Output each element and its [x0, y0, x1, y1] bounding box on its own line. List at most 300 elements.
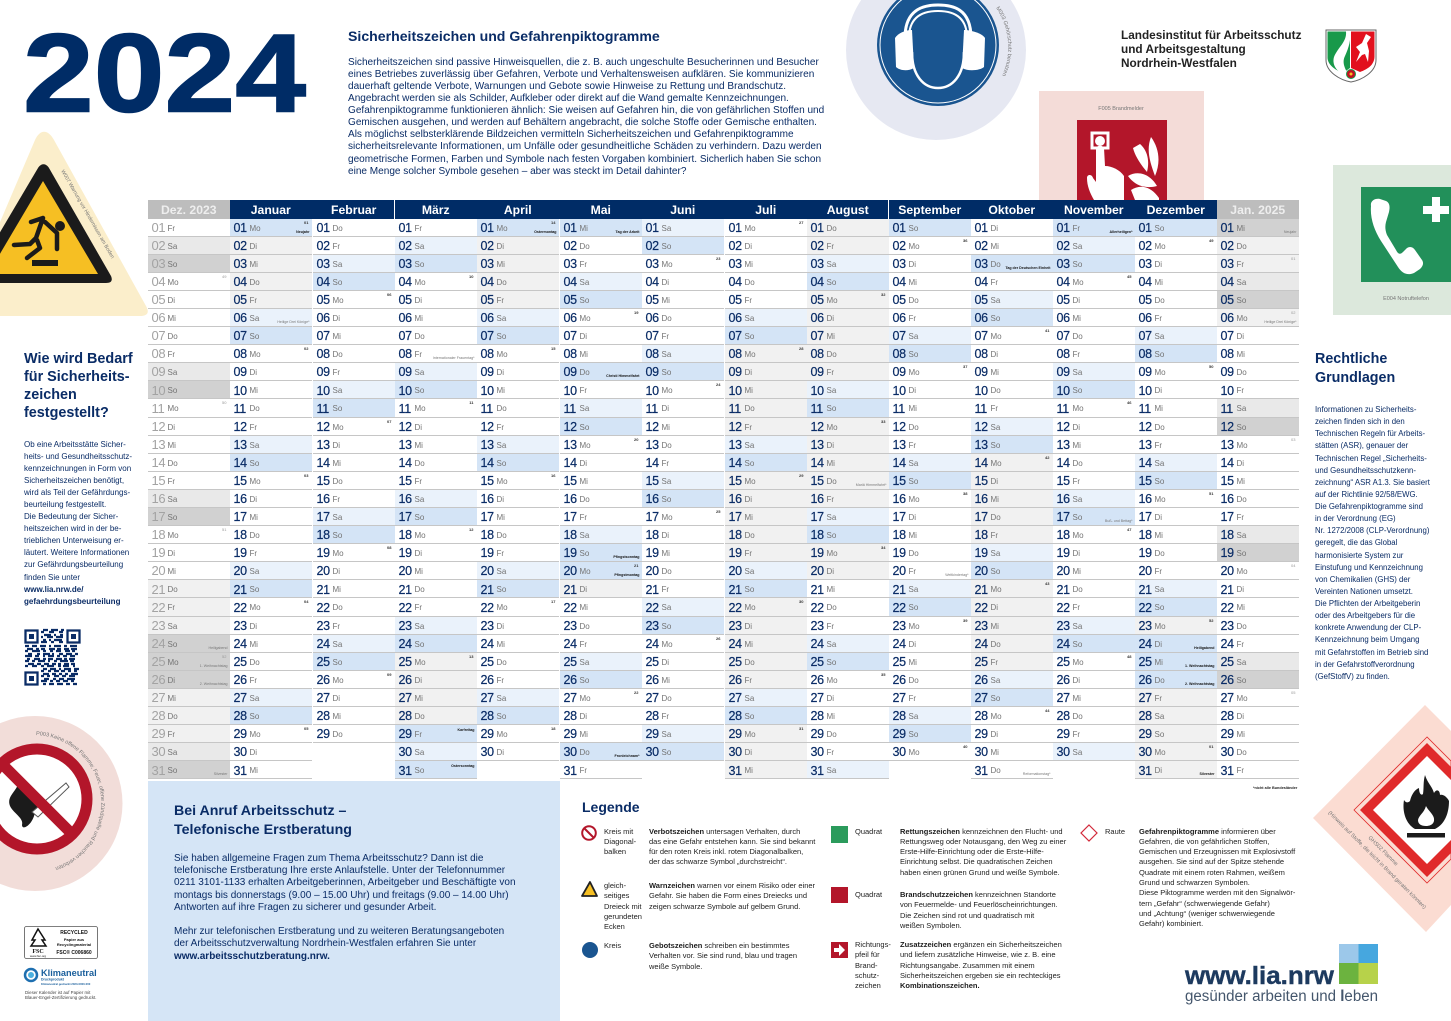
calendar column: August: Do	[826, 730, 837, 739]
calendar column: Juni: 01	[646, 221, 659, 235]
sign: warning trip hazard W007	[0, 132, 148, 316]
calendar column: April: 23	[480, 619, 494, 633]
calendar column: März: 20	[398, 564, 412, 578]
calendar column: Dezember: Di	[1154, 386, 1162, 395]
calendar column: Oktober: 17	[974, 510, 988, 524]
calendar column: Dezember 2023: 31	[152, 762, 165, 778]
calendar column: Dezember 2023: Di	[168, 296, 175, 305]
calendar column: April	[477, 203, 559, 761]
calendar column: März: Mi	[414, 567, 423, 576]
calendar column: Januar 2025: Do	[1236, 368, 1247, 377]
calendar column: Dezember 2023: 27	[152, 690, 165, 705]
intro text: eine Menge solcher Symbole gesehen – aber was steckt im Detail dahinter?	[348, 166, 686, 177]
calendar column: Januar: Neujahr	[296, 230, 310, 234]
calendar column: März: 18	[398, 528, 412, 542]
calendar column: Februar: 14	[316, 456, 330, 470]
calendar column: Januar 2025: Do	[1236, 622, 1247, 631]
calendar column: August: 01	[810, 221, 824, 235]
legend: Brandschutzzeichen	[855, 890, 1058, 930]
calendar column: Februar: Di	[332, 694, 340, 703]
legend: Zusatzzeichen: Brand-	[855, 961, 878, 970]
calendar column: September: Fr	[908, 567, 916, 576]
calendar column: Juli: 31	[728, 764, 742, 778]
calendar column: Januar: 17	[234, 510, 247, 524]
legend icon: prohibition circle	[582, 826, 596, 840]
calendar column: Juni: 02	[646, 239, 659, 253]
calendar column: Dezember: 1. Weihnachtstag	[1185, 664, 1214, 668]
calendar column: Juni: So	[662, 622, 671, 631]
calendar column: Januar 2025: 01	[1291, 256, 1296, 261]
calendar column: Juni: Do	[662, 567, 672, 576]
calendar column: Dezember: Fr	[1154, 567, 1162, 576]
legend: Gefahrenpiktogramme	[1105, 826, 1296, 928]
calendar column: August: Sa	[826, 640, 836, 649]
calendar column: Oktober: 11	[974, 402, 987, 416]
calendar column: November: So	[1072, 260, 1082, 269]
calendar column: März: Di	[414, 549, 422, 558]
calendar column: März: März	[422, 203, 450, 217]
calendar column: Juli: Do	[744, 278, 755, 287]
calendar column: Februar: 13	[316, 438, 330, 452]
climate neutral label: Klimaneutral	[41, 968, 97, 978]
calendar column: August: So	[826, 658, 836, 667]
calendar column: Dezember 2023: 16	[152, 491, 165, 506]
calendar column: Januar: Di	[250, 748, 257, 757]
calendar column: Juli: 16	[728, 492, 742, 506]
intro text: geometrische Formen, Farben und Symbole nach festen Vorgaben kombiniert. Sicherlich haben Sie schon	[348, 154, 821, 164]
calendar column: Mai: Do	[580, 495, 590, 504]
calendar column: Oktober: Mi	[990, 242, 999, 251]
calendar column: Mai: 26	[564, 673, 577, 687]
calendar column: September: Mi	[908, 658, 917, 667]
calendar column: Juni: Mi	[662, 549, 670, 558]
calendar column: Januar 2025: 24	[1220, 637, 1234, 651]
calendar column: Juni: Fr	[662, 459, 669, 468]
calendar column: Januar: 14	[234, 456, 247, 470]
calendar column: Februar: 16	[316, 492, 330, 506]
calendar column: Februar: 08	[387, 545, 392, 550]
calendar column: Dezember 2023: Fr	[168, 730, 175, 739]
calendar column: Juli: 30	[728, 745, 742, 759]
calendar column: Januar: Di	[250, 495, 257, 504]
calendar column: Juni: Di	[662, 278, 669, 287]
calendar column: Mai: 09	[564, 365, 577, 379]
calendar column: Januar: Mo	[250, 350, 261, 359]
calendar column: Oktober: 41	[1045, 328, 1050, 333]
calendar column: September: Mo	[908, 495, 920, 504]
right text: legal basis: und Gesundheitsschutzkenn-	[1315, 466, 1416, 475]
calendar column: April: Sa	[496, 441, 506, 450]
calendar column: Dezember 2023: 13	[152, 437, 165, 452]
calendar column: April: 05	[480, 293, 494, 307]
calendar column: Dezember: Dezember	[1147, 203, 1205, 217]
calendar column: Januar: 15	[234, 474, 247, 488]
calendar column: Dezember 2023: Heiligabend	[209, 646, 228, 650]
calendar column: Februar: Februar	[331, 203, 376, 217]
calendar column: Januar: Sa	[250, 441, 259, 450]
left text: Gefährdungsbeurteilung: läutert. Weitere Informationen	[24, 548, 129, 557]
calendar column: November: Mi	[1072, 441, 1081, 450]
calendar column: Juni: 16	[646, 492, 659, 506]
calendar column: Dezember 2023: So	[168, 766, 177, 775]
calendar column: Januar: Mi	[250, 386, 258, 395]
calendar column: Februar: 28	[316, 709, 330, 723]
calendar column: Januar 2025: 04	[1291, 563, 1296, 568]
calendar column: September: 04	[892, 275, 906, 289]
calendar column: Mai: Mo	[580, 694, 591, 703]
calendar column: Juni: So	[662, 748, 671, 757]
calendar column: November: Fr	[1072, 730, 1080, 739]
calendar column: September: 40	[963, 744, 968, 749]
calendar column: Oktober: Do	[990, 513, 1001, 522]
calendar column: Januar 2025: 21	[1220, 583, 1234, 597]
calendar column: August: 28	[810, 709, 824, 723]
calendar column: Oktober: 26	[974, 673, 988, 687]
calendar column: Juni: Fr	[662, 332, 669, 341]
calendar column: Dezember: Di	[1154, 766, 1162, 775]
calendar column: Dezember 2023: 17	[152, 509, 165, 524]
calendar column: Januar 2025: 14	[1220, 456, 1234, 470]
calendar column: Dezember 2023: 02	[152, 238, 165, 253]
calendar column: September: September	[898, 203, 961, 217]
calendar column: März: Di	[414, 296, 422, 305]
calendar column: August: Mi	[826, 585, 835, 594]
calendar column: Juli: 01	[728, 221, 742, 235]
calendar column: Januar 2025: 08	[1220, 347, 1234, 361]
calendar column: März: Mo	[414, 278, 426, 287]
calendar column: Juni: Mo	[662, 640, 673, 649]
calendar column: November: 26	[1056, 673, 1070, 687]
calendar column: Juli: So	[744, 712, 754, 721]
calendar column: Juni: 23	[716, 256, 720, 261]
calendar column: März: Sa	[414, 368, 424, 377]
calendar column: Dezember: Silvester	[1200, 772, 1214, 776]
calendar column: September: 37	[963, 364, 968, 369]
calendar column: November: 13	[1056, 438, 1070, 452]
calendar column: Februar: 04	[316, 275, 330, 289]
calendar column: Juni: Sa	[662, 730, 671, 739]
calendar column: Januar 2025: Fr	[1236, 260, 1244, 269]
calendar column: Februar	[313, 203, 395, 743]
calendar column: Dezember: Do	[1154, 549, 1165, 558]
calendar column: Januar: 10	[234, 384, 247, 398]
calendar column: Januar: 05	[304, 726, 308, 731]
calendar column: Mai: Do	[580, 622, 590, 631]
legend: Warnzeichen	[604, 881, 815, 931]
calendar column: August: Sa	[826, 386, 836, 395]
legend: Gebotszeichen: Gebotszeichen schreiben ein bestimmtes	[649, 941, 789, 950]
calendar column: Juni: Sa	[662, 224, 671, 232]
calendar column: August: 07	[810, 329, 824, 343]
legend: Zusatzzeichen: Richtungs-	[855, 940, 891, 949]
FSC recycled label: www.fsc.org	[30, 954, 46, 958]
calendar column: Juni: Do	[662, 694, 672, 703]
calendar column: August: Di	[826, 314, 834, 323]
calendar column: Juni: 22	[646, 601, 659, 615]
right text: legal basis: harmonisierte System zur	[1315, 550, 1403, 560]
calendar column: Juni: 09	[646, 365, 659, 379]
right text: legal basis: (GefStoffV) zu finden.	[1315, 672, 1390, 681]
calendar column: Juni: Di	[662, 531, 669, 540]
right text: legal basis: auf der Richtlinie 92/58/EWG.	[1315, 490, 1418, 499]
calendar column: Juli: 31	[799, 726, 804, 731]
state coat of arms NRW	[1326, 30, 1376, 82]
calendar column: November: 12	[1056, 420, 1070, 434]
calendar column: Oktober: 29	[974, 727, 988, 741]
calendar column: September: 05	[892, 293, 906, 307]
calendar column: Januar: 01	[304, 220, 308, 224]
calendar column: September: Sa	[908, 585, 918, 594]
calendar column: Oktober: So	[990, 694, 1000, 703]
calendar column: April: 01	[480, 221, 494, 235]
calendar column: Februar: Di	[332, 567, 340, 576]
intro text	[348, 56, 824, 177]
calendar column: Mai: Fr	[580, 260, 587, 269]
calendar column: August: Mi	[826, 712, 835, 721]
calendar column: August: 17	[810, 510, 824, 524]
calendar column: Juli: 24	[728, 637, 742, 651]
calendar column: November: November	[1064, 203, 1124, 217]
calendar column: Dezember: 15	[1138, 474, 1152, 488]
calendar column: Mai: Pfingstsonntag	[613, 555, 640, 559]
calendar column: November: 29	[1056, 727, 1070, 741]
calendar column: Juli: Sa	[744, 441, 754, 450]
calendar column: Januar: Mi	[250, 640, 258, 649]
calendar column: Februar: Mo	[332, 296, 344, 305]
calendar column: Juni: Fr	[662, 585, 669, 594]
calendar column: Mai: 19	[634, 310, 638, 315]
calendar column: Dezember: 30	[1138, 745, 1152, 759]
calendar column: Dezember 2023: Fr	[168, 224, 175, 232]
calendar column: Dezember 2023: 28	[152, 708, 165, 723]
calendar column: Dezember: Mo	[1154, 622, 1166, 631]
calendar column: Dezember 2023: Sa	[168, 748, 177, 757]
calendar column: Oktober: 28	[974, 709, 988, 723]
calendar column: Oktober: 16	[974, 492, 988, 506]
calendar column: August: 09	[810, 365, 824, 379]
institute name: Landesinstitut für Arbeitsschutz	[1121, 28, 1301, 42]
calendar column: Juli	[725, 203, 807, 779]
calendar column: Februar: Mo	[332, 423, 344, 432]
calendar column: Dezember 2023: Fr	[168, 350, 175, 359]
calendar column: Juli: Fr	[744, 549, 752, 558]
calendar column: Dezember 2023	[148, 203, 230, 779]
calendar column: März: 29	[398, 727, 412, 741]
calendar column: Dezember: 11	[1138, 402, 1151, 416]
calendar column: September: 30	[892, 745, 906, 759]
calendar column: Dezember: 08	[1138, 347, 1152, 361]
calendar column: November: Di	[1072, 296, 1080, 305]
calendar column: April: Ostermontag	[534, 230, 556, 234]
calendar column: Juni: 24	[716, 382, 720, 387]
calendar column: Dezember 2023: Mo	[168, 658, 179, 667]
calendar column: Dezember: 12	[1138, 420, 1152, 434]
calendar column: März: 24	[398, 637, 412, 651]
calendar column: Juni: 28	[646, 709, 659, 723]
calendar column: Dezember 2023: Do	[168, 332, 178, 341]
calendar column: Februar: So	[332, 278, 342, 287]
calendar column: Mai: 20	[634, 437, 638, 442]
calendar column: April: 04	[480, 275, 494, 289]
calendar column: August: 12	[810, 420, 824, 434]
calendar column: Februar: 02	[316, 239, 330, 253]
calendar column: Oktober: Reformationstag*	[1023, 772, 1050, 776]
calendar column: Februar: 17	[316, 510, 330, 524]
calendar column: März: So	[414, 260, 424, 269]
calendar column: Januar 2025: 20	[1220, 564, 1234, 578]
calendar column: Dezember 2023: 10	[152, 383, 165, 398]
calendar column: Mai: 18	[564, 528, 577, 542]
climate neutral label: Klimaneutral gedruckt 2023-0000-000	[41, 982, 91, 986]
calendar column: September: Di	[908, 386, 916, 395]
calendar column: August: Di	[826, 567, 834, 576]
right text: legal basis: in der Gefahrstoffverordnung	[1315, 660, 1415, 669]
calendar column: Dezember: Do	[1154, 296, 1165, 305]
calendar column: Juli: Mo	[744, 350, 756, 359]
calendar column: März: 13	[469, 654, 474, 659]
calendar column: Juli: 22	[728, 601, 742, 615]
calendar column: März: 21	[398, 583, 412, 597]
sign: mandatory ear protection	[846, 0, 1026, 140]
calendar column: September: Do	[908, 296, 919, 305]
calendar column: Februar: 29	[316, 727, 330, 741]
calendar column: Juli: So	[744, 585, 754, 594]
calendar column: Dezember: So	[1154, 350, 1164, 359]
intro text: dauerhaft geltende Verbote, Warnungen und Gebote sowie Hinweise zu Rettung und Brandschutz.	[348, 81, 786, 92]
calendar column: Januar 2025: 11	[1220, 402, 1233, 416]
left text: Gefährdungsbeurteilung: finden Sie unter	[24, 573, 80, 582]
calendar column: Dezember: Mi	[1154, 278, 1163, 287]
calendar column: Dezember: 52	[1209, 618, 1214, 623]
left text: Gefährdungsbeurteilung: zur Gefährdungsbeurteilung	[24, 560, 123, 569]
sign: prohibition no open flame P003: P003 Keine offene Flamme; Feuer, offene Zündquelle und Rauchen verboten	[36, 731, 105, 870]
calendar column: November: 10	[1056, 384, 1070, 398]
calendar column: September: So	[908, 350, 918, 359]
legend: Rettungszeichen: Quadrat	[855, 826, 882, 836]
calendar column: Mai	[560, 203, 642, 779]
calendar column: Dezember 2023: Mo	[168, 404, 179, 413]
calendar column: April: So	[496, 459, 506, 468]
calendar column: Dezember 2023: 25	[152, 654, 165, 669]
calendar column: März: Sa	[414, 242, 424, 251]
legend: Rettungszeichen: Einrichtung selbst. Die quadratischen Zeichen	[900, 857, 1053, 866]
calendar column: Dezember: 01	[1209, 744, 1214, 749]
calendar column: Oktober: 05	[974, 293, 988, 307]
legend: Rettungszeichen: haben einen grünen Grund und weiße Symbole.	[900, 868, 1060, 877]
calendar column: Dezember: 49	[1209, 238, 1214, 243]
calendar column: August: Mo	[826, 549, 838, 558]
calendar column: August: 13	[810, 438, 824, 452]
legend: Gebotszeichen: weiße Symbole.	[649, 962, 702, 971]
calendar column: März: Sa	[414, 622, 424, 631]
calendar column: Februar: Mo	[332, 549, 344, 558]
calendar column: Juli: 19	[728, 546, 742, 560]
calendar column: Februar: 15	[316, 474, 330, 488]
calendar column: August: So	[826, 278, 836, 287]
calendar column: Dezember: Di	[1154, 260, 1162, 269]
calendar column: April: 30	[480, 745, 494, 759]
calendar column: Oktober: Do	[990, 386, 1001, 395]
calendar column: Oktober: Mi	[990, 748, 999, 757]
calendar column: Januar 2025: 12	[1220, 420, 1234, 434]
right text: legal basis: Die Pflichten der Arbeitgeberin	[1315, 599, 1420, 608]
calendar column: Februar: 12	[316, 420, 330, 434]
legend: Verbotszeichen	[604, 826, 816, 866]
right text: legal basis: Technischen Regeln für Arbeits-	[1315, 429, 1425, 438]
calendar column: Januar: Do	[250, 404, 260, 413]
calendar column: November: Di	[1072, 549, 1080, 558]
right text: legal basis: Technischen Regel „Sicherheits-	[1315, 454, 1427, 462]
calendar column: Dezember: Mo	[1154, 368, 1166, 377]
calendar column: September: Di	[908, 260, 916, 269]
calendar column: März: Do	[414, 459, 425, 468]
calendar column: Januar 2025: 15	[1220, 474, 1234, 488]
calendar column: November: Mo	[1072, 404, 1084, 413]
left text: Gefährdungsbeurteilung: kennzeichnungen in Form von	[24, 464, 131, 473]
calendar column: Juni: So	[662, 368, 671, 377]
calendar column: April: 26	[480, 673, 494, 687]
calendar column: September: 21	[892, 583, 906, 597]
calendar column: August: August	[827, 203, 869, 217]
calendar column: März: 23	[398, 619, 412, 633]
legend icon: blue circle	[582, 942, 598, 958]
legend icon: green square	[831, 826, 848, 843]
calendar column: Januar 2025: Mi	[1236, 350, 1245, 359]
calendar column: August: 32	[881, 292, 886, 297]
calendar column: Dezember: 19	[1138, 546, 1152, 560]
calendar column: März: 11	[469, 400, 474, 405]
logo: www.lia.nrw	[1184, 944, 1378, 1005]
calendar column: Januar 2025: 02	[1220, 239, 1234, 253]
calendar column: November: Di	[1072, 676, 1080, 685]
calendar column: Oktober: So	[990, 567, 1000, 576]
calendar column: August: 34	[881, 545, 886, 550]
calendar column: November: Di	[1072, 423, 1080, 432]
calendar column: Dezember	[1135, 203, 1217, 779]
calendar column: März: Ostersonntag	[451, 764, 474, 768]
calendar column: Februar: 08	[316, 347, 330, 361]
calendar column: Januar 2025: 16	[1220, 492, 1234, 506]
calendar column: Mai: So	[580, 423, 589, 432]
left text: Gefährdungsbeurteilung: heitszeichen wird in der be-	[24, 524, 121, 533]
calendar column: Januar: 21	[234, 583, 247, 597]
calendar column: April: 29	[480, 727, 494, 741]
calendar column: Dezember: 14	[1138, 456, 1152, 470]
calendar column: Januar 2025: Di	[1236, 459, 1244, 468]
calendar footnote: *nicht alle Bundesländer	[1253, 786, 1297, 790]
calendar column: Dezember: 26	[1138, 673, 1152, 687]
legend: Gefahrenpiktogramme: Gefahrenpiktogramme informieren über	[1139, 826, 1276, 836]
calendar column: November: 22	[1056, 601, 1070, 615]
calendar column: März: Mi	[414, 441, 423, 450]
panel heading: Telefonische Erstberatung	[174, 822, 352, 838]
left text: Gefährdungsbeurteilung: heits- und Gesundheitsschutz-	[24, 452, 132, 461]
calendar column: Mai: Fr	[580, 640, 587, 649]
calendar column: November: 01	[1056, 221, 1070, 235]
calendar column: Dezember 2023: Mi	[168, 567, 176, 576]
legend: Verbotszeichen: Verbotszeichen untersagen Verhalten, durch	[649, 826, 800, 836]
calendar column: März: Mo	[414, 404, 426, 413]
right text: legal basis: Nr. 1272/2008 (CLP-Verordnung)	[1315, 526, 1429, 535]
calendar column: November: Sa	[1072, 748, 1082, 757]
calendar column: März: Mo	[414, 658, 426, 667]
legend: Zusatzzeichen: Richtungsangabe. Zusammen mit einem	[900, 961, 1035, 970]
calendar column: Juli: 15	[728, 474, 742, 488]
calendar column: Januar 2025: 05	[1291, 690, 1296, 695]
calendar column: November: Mo	[1072, 531, 1084, 540]
calendar column: Juni: 24	[646, 637, 659, 651]
calendar column: Oktober: 22	[974, 601, 988, 615]
